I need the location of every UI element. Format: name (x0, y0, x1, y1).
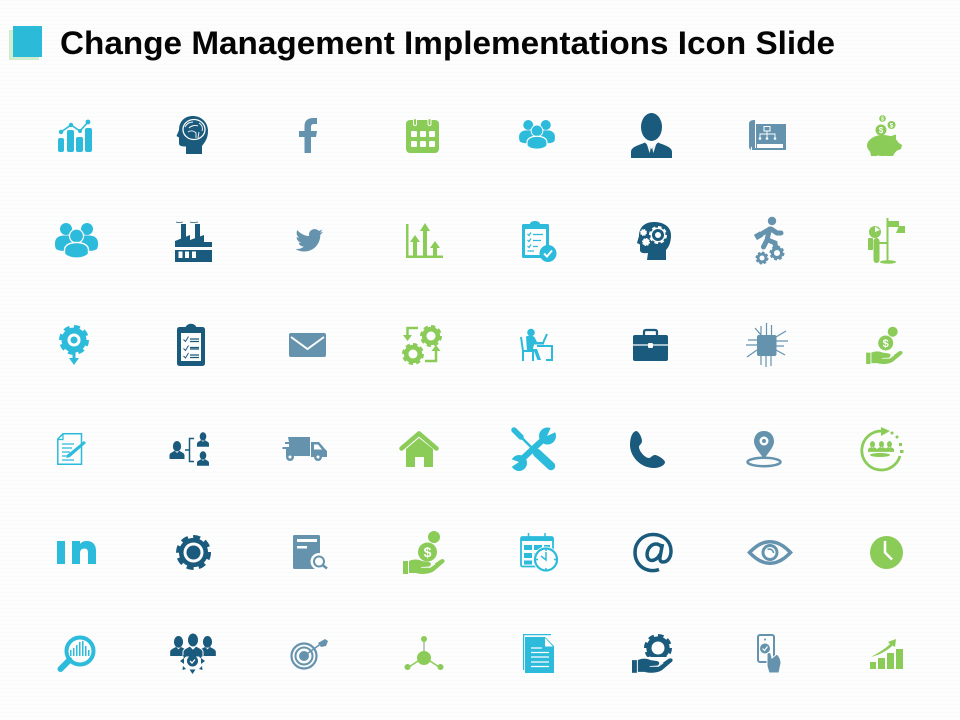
icon: map location pin (748, 431, 780, 466)
icon: hand holding gear (632, 636, 673, 673)
icon: piggy bank with coins: $ (879, 126, 884, 135)
icon: growth bars with arrow (870, 639, 903, 669)
icon: piggy bank with coins: $ (881, 116, 884, 122)
icon: eye (747, 540, 793, 565)
icon: person at desk (521, 329, 552, 361)
icon: target with arrow (292, 639, 328, 668)
icon: runner on gears (754, 217, 783, 263)
icon grid (55, 113, 905, 674)
icon: settings gear (179, 538, 208, 567)
icon: magnifier with chart (60, 638, 94, 669)
icon: hand with coin large (403, 531, 445, 574)
icon: head with gears (637, 222, 671, 260)
icon: at sign (635, 534, 671, 571)
icon: piggy bank with coins (867, 115, 902, 156)
icon: microchip (746, 323, 788, 367)
icon: piggy bank with coins: $ (890, 122, 894, 130)
icon: calendar (406, 118, 439, 153)
title: Change Management Implementations Icon Slide (60, 25, 835, 61)
icon: factory (175, 222, 212, 262)
icon: bar chart with trend line (58, 120, 92, 152)
icon: document stack (524, 635, 554, 673)
icon: gear with down arrow (62, 328, 86, 365)
icon: hand with coin large: $ (424, 544, 432, 560)
icon: document search (293, 535, 328, 570)
icon: explorer with flag (868, 218, 905, 264)
icon: document with pen (58, 434, 86, 464)
icon: calendar with clock (521, 533, 559, 572)
icon: dark checklist clipboard (177, 324, 205, 366)
icon: clipboard with check badge (522, 221, 556, 262)
icon: telephone handset (630, 431, 665, 468)
icon: group of people large (55, 223, 98, 258)
icon: group of people small (519, 120, 555, 149)
icon: head with brain (176, 116, 208, 154)
icon: twitter (296, 229, 323, 252)
icon: home (402, 434, 436, 467)
icon: growth arrows chart (406, 223, 443, 258)
icon: linkedin (57, 541, 96, 564)
icon: people hierarchy (170, 432, 209, 466)
title marker square (9, 26, 42, 60)
icon: team in cycle arrow (862, 427, 904, 470)
icon: hand with coin small (866, 327, 903, 364)
icon: team with check and arrows (170, 633, 216, 674)
icon: facebook (299, 118, 317, 153)
icon: gears with arrows (403, 327, 440, 363)
icon: briefcase (633, 330, 668, 361)
icon: network hub (404, 636, 444, 670)
icon: businessman (631, 113, 672, 158)
icon: hand with coin small: $ (883, 338, 889, 350)
icon: clock (870, 536, 903, 569)
icon: delivery truck (282, 437, 327, 461)
icon: envelope (289, 333, 326, 357)
icon: phone in hand with check (758, 635, 781, 673)
icon: crossed wrench and screwdriver (508, 425, 558, 471)
icon: blueprint (749, 120, 786, 150)
